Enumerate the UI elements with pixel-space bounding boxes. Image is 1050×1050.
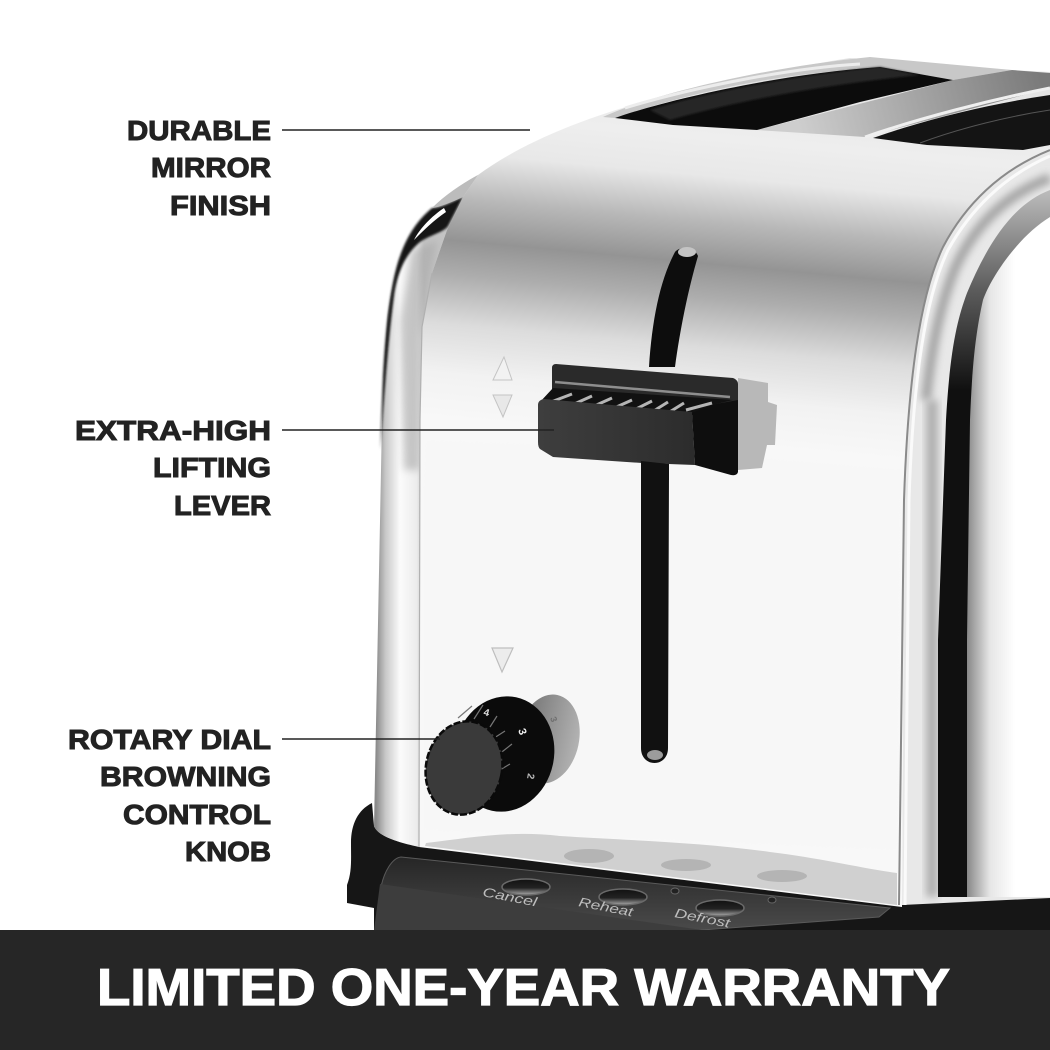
- right chrome side: [902, 150, 1050, 905]
- leader line: [282, 738, 440, 740]
- lever teeth dark: [540, 388, 733, 416]
- banner background: [0, 930, 1050, 1050]
- label text: DURABLE: [127, 115, 271, 146]
- bread slot two: [873, 95, 1050, 150]
- label text: FINISH: [170, 190, 271, 221]
- dial number 2: 2: [524, 772, 536, 780]
- label text: CONTROL: [123, 799, 271, 830]
- lever side recess: [692, 400, 738, 475]
- label defrost: Defrost: [673, 905, 733, 931]
- banner text: LIMITED ONE-YEAR WARRANTY: [97, 959, 950, 1017]
- face right edge highlight: [899, 150, 1050, 905]
- up arrow: [493, 357, 512, 380]
- button defrost: [696, 900, 744, 916]
- right chrome lower shadow: [926, 400, 938, 897]
- left top chrome: [432, 175, 478, 208]
- left chrome shading: [400, 240, 438, 470]
- dial number 4: 4: [482, 707, 491, 719]
- lever teeth: [551, 394, 712, 413]
- warranty banner: [0, 930, 1050, 1050]
- reflected oval one: [564, 849, 614, 863]
- slider track highlight: [678, 247, 696, 257]
- label text: LIFTING: [153, 452, 271, 483]
- slider track lower: [641, 470, 669, 763]
- slider track upper: [649, 248, 698, 367]
- left outer dark edge: [380, 197, 463, 450]
- label text: ROTARY DIAL: [68, 724, 271, 755]
- slider track end highlight: [647, 750, 663, 760]
- callout: extra-high lifting lever: [75, 415, 554, 521]
- callout: rotary dial browning control knob: [68, 724, 440, 867]
- right white section: [965, 217, 1050, 897]
- indicator light one: [671, 888, 679, 894]
- leader line: [282, 129, 530, 131]
- rotary dial: [417, 687, 588, 822]
- label text: [75, 415, 271, 521]
- dial arrow: [492, 648, 513, 672]
- face left edge: [419, 273, 432, 847]
- control panel: [381, 857, 890, 930]
- face reflection of panel: [425, 834, 897, 905]
- top rim: [603, 57, 1012, 118]
- label text: EXTRA-HIGH: [75, 415, 271, 446]
- dial black disk: [443, 687, 565, 821]
- label text: KNOB: [185, 836, 271, 867]
- label text: [127, 115, 271, 221]
- reflected oval three: [757, 870, 807, 882]
- lever translucent side: [738, 378, 777, 470]
- top rim light: [625, 64, 860, 108]
- dial tick marks: [458, 705, 512, 770]
- slot two inner line: [920, 110, 1050, 143]
- slot one inner shade: [650, 67, 920, 120]
- label text: MIRROR: [151, 152, 271, 183]
- label cancel: Cancel: [481, 884, 540, 910]
- leader line: [282, 429, 554, 431]
- dial number 3: 3: [515, 727, 529, 737]
- button cancel: [502, 879, 550, 895]
- face right edge light line: [905, 156, 1050, 905]
- centre band between slots: [757, 70, 1050, 137]
- face lower white area: [424, 440, 905, 850]
- dial rear ring: [508, 689, 588, 789]
- dial number rear: 3: [548, 715, 559, 723]
- toaster illustration: [347, 57, 1050, 931]
- slot rim line: [865, 88, 1050, 137]
- left chrome side: [374, 175, 478, 847]
- label text: LEVER: [174, 490, 271, 521]
- left corner highlight: [414, 208, 446, 240]
- lever grip: [538, 399, 695, 465]
- toaster base: [347, 803, 1050, 930]
- right chrome shadow: [926, 178, 1050, 400]
- indicator light two: [768, 897, 776, 903]
- label text: BROWNING: [100, 761, 271, 792]
- front face: [419, 58, 1050, 907]
- lever black stem: [641, 461, 669, 480]
- panel lower base: [374, 884, 702, 930]
- label text: [68, 724, 271, 867]
- right black band: [938, 190, 1050, 897]
- button reheat: [599, 889, 647, 905]
- label reheat: Reheat: [577, 894, 636, 920]
- reflected oval two: [661, 859, 711, 871]
- lever ridge: [555, 382, 730, 397]
- callout: durable mirror finish: [127, 115, 530, 221]
- dial front cap: [417, 714, 511, 822]
- lever back plate: [552, 364, 738, 410]
- down arrow: [493, 395, 512, 417]
- reflected buttons: [564, 849, 807, 882]
- bread slot one: [615, 67, 953, 130]
